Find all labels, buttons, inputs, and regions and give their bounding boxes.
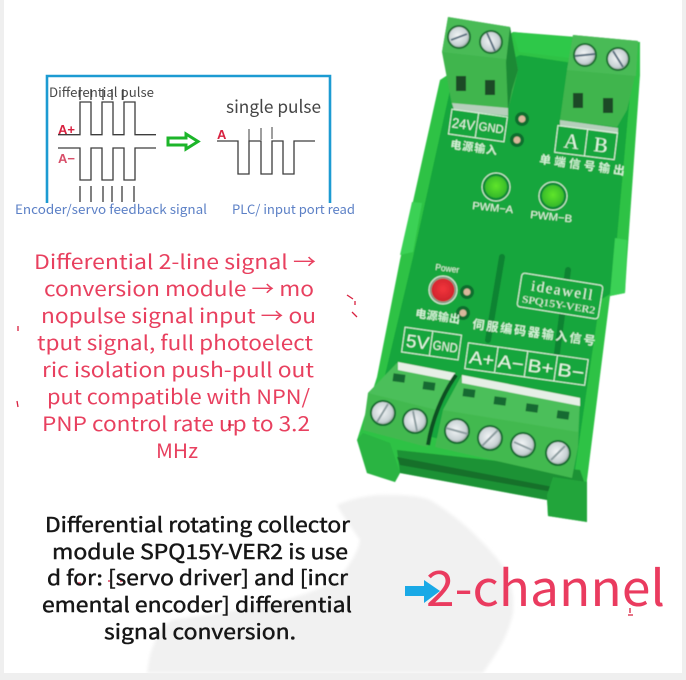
- waveform: differential A+ and A-: [58, 87, 156, 202]
- caption: PLC input: PLC/ input port read: [232, 199, 355, 218]
- silkscreen: 5V GND box: [402, 327, 462, 360]
- silkscreen: power input label: 电源输入: [450, 137, 498, 158]
- waveform: single pulse A: [217, 127, 315, 174]
- right side clip: [610, 238, 627, 296]
- module outer housing: [357, 32, 640, 522]
- silkscreen: encoder input label: 伺服编码器输入信号: [472, 316, 596, 348]
- label: 2-channel: 2-channel: [426, 550, 665, 621]
- terminal block: power output: [363, 362, 456, 447]
- black description text: module SPQ15Y-VER2 is use: [52, 535, 348, 565]
- arrow: green conversion arrow: [168, 134, 198, 149]
- arrow: blue pointer: [405, 580, 440, 603]
- silkscreen: 24V GND box: GND: [478, 119, 505, 137]
- silkscreen: A B box: B: [592, 132, 609, 158]
- black description text: signal conversion.: [104, 615, 296, 645]
- red specks: [17, 295, 633, 615]
- left side clip: [400, 202, 422, 255]
- label: A+: A+: [58, 122, 75, 137]
- circuit board face: [385, 55, 632, 470]
- silkscreen: A+ A- B+ B- box: B+: [526, 355, 555, 379]
- red description text: put compatible with NPN/: [47, 381, 310, 410]
- top rail: [513, 32, 572, 58]
- brand box: ideawell: SPQ15Y-VER2: [521, 294, 596, 317]
- black description text: [42, 508, 352, 645]
- caption: encoder feedback: Encoder/servo feedback signal: [15, 199, 207, 218]
- label: A-: A−: [58, 151, 75, 166]
- signal conversion diagram: [15, 76, 355, 218]
- label: A: A: [217, 127, 227, 142]
- LED: PWM-B: [530, 182, 573, 225]
- blue diagram frame: [47, 76, 330, 203]
- red description text: MHz: [156, 435, 198, 464]
- red description text: PNP control rate up to 3.2: [42, 408, 310, 437]
- silkscreen: A+ A- B+ B- box: A+: [468, 347, 496, 370]
- silkscreen: 5V GND box: 5V: [405, 331, 430, 354]
- LED: PWM-A: PWM−A: [472, 200, 514, 216]
- heading: differential pulse: Differential pulse: [49, 82, 154, 101]
- LED: power: Power: [435, 262, 460, 275]
- brand box: ideawell: ideawell: [530, 278, 594, 304]
- product photo: green module: [357, 17, 640, 522]
- vias: [456, 112, 529, 320]
- black description text: emental encoder] differential: [42, 588, 352, 618]
- silkscreen: A B box: [555, 126, 617, 160]
- silkscreen: A+ A- B+ B- box: [465, 343, 588, 385]
- grey background silhouette: [147, 495, 513, 673]
- red description text: nopulse signal input → ou: [41, 300, 316, 329]
- mounting slots: [488, 257, 568, 353]
- brand box: ideawell: [517, 273, 603, 319]
- red description text: ric isolation push-pull out: [42, 354, 315, 383]
- silkscreen: A+ A- B+ B- box: A−: [497, 351, 525, 375]
- red description text: Differential 2-line signal →: [34, 246, 316, 275]
- terminal block: power input: [442, 17, 518, 116]
- silkscreen: 24V GND box: [448, 109, 507, 142]
- silkscreen: signal output label: 单端信号输出: [539, 152, 626, 178]
- bottom rail: [357, 433, 587, 522]
- black description text: Differential rotating collector: [45, 508, 350, 538]
- red description text: [34, 246, 316, 464]
- black description text: d for: [servo driver] and [incr: [47, 561, 348, 591]
- LED: PWM-A: [472, 173, 514, 216]
- silkscreen: 5V GND box: GND: [432, 337, 459, 356]
- terminal block: signal output: [560, 35, 638, 134]
- red description text: conversion module → mo: [44, 273, 314, 302]
- heading: single pulse: single pulse: [226, 94, 321, 119]
- LED: power: [429, 262, 460, 304]
- silkscreen: power output label: 电源输出: [415, 306, 461, 326]
- red description text: tput signal, full photoelect: [37, 327, 314, 356]
- LED: PWM-B: PWM−B: [530, 209, 573, 225]
- silkscreen: 24V GND box: 24V: [451, 114, 477, 134]
- silkscreen: A B box: A: [563, 129, 581, 154]
- terminal block: encoder input: [435, 375, 580, 478]
- silkscreen: A+ A- B+ B- box: B−: [556, 360, 586, 383]
